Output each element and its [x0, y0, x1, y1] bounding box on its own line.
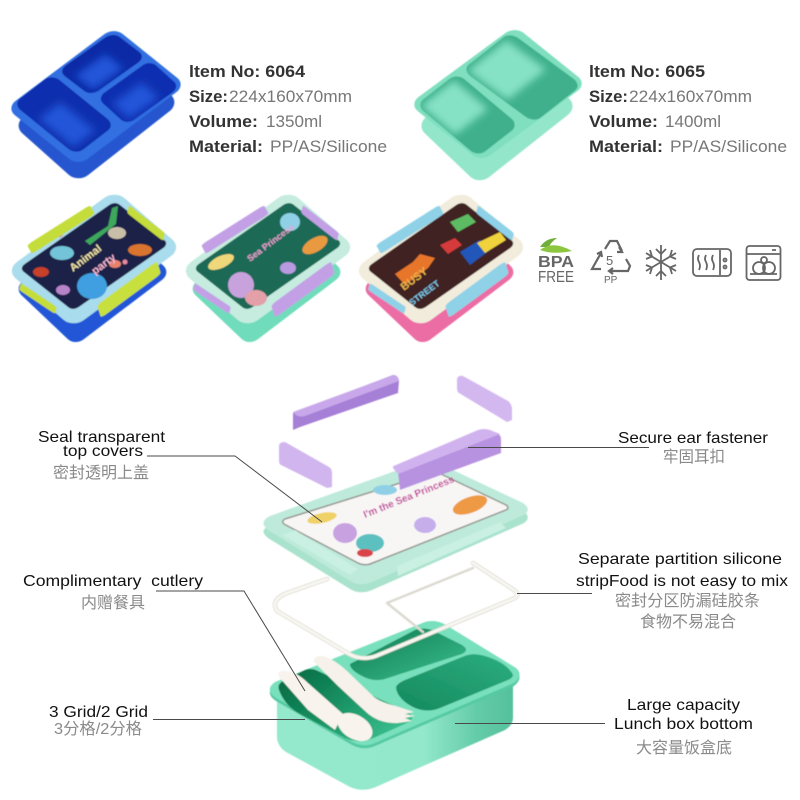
icon: BPA free: [538, 238, 574, 286]
callout: large capacity lunch box bottom: Large capacity: [627, 697, 740, 714]
callout: separate partition silicone strip: stripFood is not easy to mix: [576, 573, 788, 590]
spec text: item 6065: Material:: [589, 137, 663, 156]
callout: complimentary cutlery: Complimentary cutlery: [23, 573, 203, 590]
callout: seal transparent top covers: top covers: [63, 443, 143, 460]
spec text: item 6065: [589, 62, 787, 156]
callout: complimentary cutlery: 内赠餐具: [81, 594, 145, 612]
callout: 3 grid / 2 grid: [49, 704, 148, 738]
spec text: item 6065: ltem No: 6065: [589, 62, 705, 81]
callout: 3 grid / 2 grid: 3 Grid/2 Grid: [49, 704, 148, 721]
leader lines: [147, 448, 649, 724]
callout: secure ear fastener: Secure ear fastener: [618, 430, 769, 447]
spec text: item 6064: 224x160x70mm: [229, 87, 352, 106]
callout: secure ear fastener: 牢固耳扣: [663, 448, 725, 466]
part: purple fastener back left: [293, 375, 399, 430]
part: purple fastener front right: [393, 429, 501, 490]
icon: dishwasher safe: [746, 246, 780, 280]
part: green box bottom: [270, 621, 520, 790]
spec text: item 6064: 1350ml: [266, 112, 322, 131]
part: lid with transparent cover: I'm the Sea Princess: [362, 474, 456, 521]
part: purple fastener back right: [457, 376, 512, 422]
callout: separate partition silicone strip: Separate partition silicone: [578, 551, 782, 568]
spec text: item 6065: PP/AS/Silicone: [670, 137, 787, 156]
product: Animal Party lunch box: [6, 190, 182, 346]
part: lid with transparent cover: [263, 461, 528, 592]
product: Busy Street lunch box: [353, 190, 529, 346]
spec text: item 6064: Volume:: [189, 112, 258, 131]
part: fork: [314, 656, 415, 723]
spec text: item 6064: [189, 62, 387, 156]
spec text: item 6065: 224x160x70mm: [629, 87, 752, 106]
product: Mermaid lunch box: [180, 190, 356, 346]
callout: large capacity lunch box bottom: 大容量饭盒底: [636, 739, 732, 757]
product: Busy Street lunch box: BUSY: [399, 265, 431, 293]
spec text: item 6064: ltem No: 6064: [189, 62, 306, 81]
icon: BPA free: BPA: [538, 254, 574, 271]
callout: seal transparent top covers: [38, 429, 166, 482]
callout: complimentary cutlery: [23, 573, 203, 612]
icon: recycle 5 PP: PP: [604, 275, 618, 286]
product: blue three-part box 6064: [6, 27, 186, 183]
icon: BPA free: FREE: [538, 269, 574, 286]
callout: seal transparent top covers: Seal transparent: [38, 429, 166, 446]
callout: seal transparent top covers: 密封透明上盖: [53, 464, 149, 482]
part: spoon: [278, 671, 377, 747]
icon: microwave safe: [693, 249, 731, 276]
product: Busy Street lunch box: STREET: [407, 278, 442, 308]
icon: recycle 5 PP: 5: [606, 253, 613, 268]
spec text: item 6064: PP/AS/Silicone: [270, 137, 387, 156]
icon: recycle 5 PP: [592, 241, 630, 286]
spec text: item 6064: Size:: [189, 87, 228, 106]
part: silicone strip: [275, 563, 517, 658]
callout: large capacity lunch box bottom: Lunch box bottom: [614, 716, 753, 733]
callout: separate partition silicone strip: 食物不易混合: [640, 613, 736, 631]
spec text: item 6065: Size:: [589, 87, 628, 106]
callout: secure ear fastener: [618, 430, 769, 466]
exploded diagram: lunch box parts: [263, 375, 528, 790]
callout: large capacity lunch box bottom: [614, 697, 753, 757]
spec text: item 6065: Volume:: [589, 112, 658, 131]
product: Animal Party lunch box: Animal: [68, 243, 104, 274]
callout: separate partition silicone strip: 密封分区防漏硅胶条: [615, 592, 760, 610]
icon: snowflake freezer safe: [646, 245, 676, 280]
product: Mermaid lunch box: Sea Princess: [245, 222, 296, 264]
callout: 3 grid / 2 grid: 3分格/2分格: [54, 720, 142, 738]
callout: separate partition silicone strip: [576, 551, 788, 631]
product: Animal Party lunch box: party: [90, 251, 119, 277]
product: teal two-part box 6065: [409, 26, 587, 185]
spec text: item 6065: 1400ml: [665, 112, 721, 131]
part: purple fastener front left: [279, 442, 332, 488]
spec text: item 6064: Material:: [189, 137, 263, 156]
